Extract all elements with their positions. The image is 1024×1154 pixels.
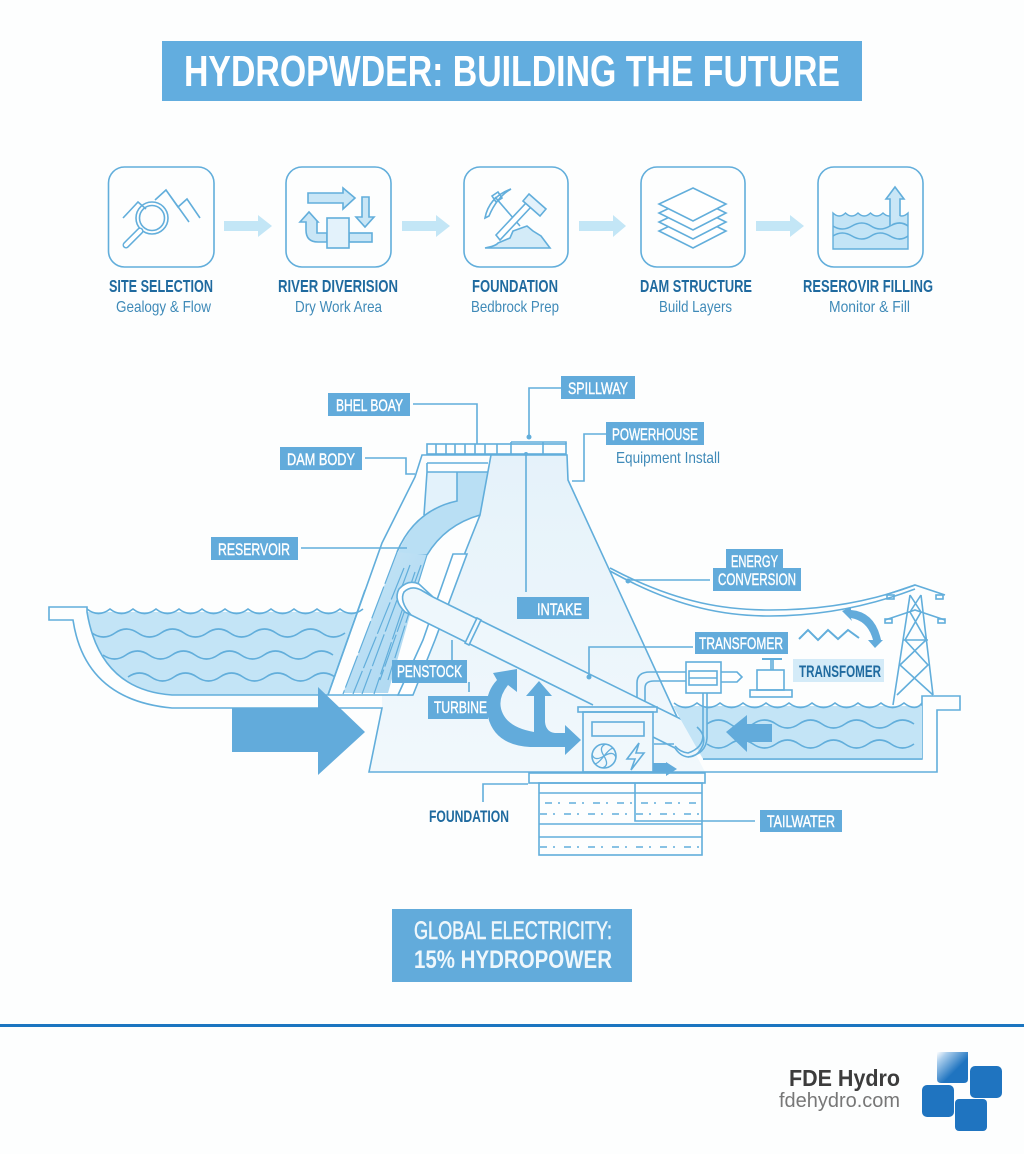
callout: global electricity xyxy=(392,909,632,982)
label: spillway xyxy=(526,376,635,440)
arrow xyxy=(756,215,804,237)
label: energy conversion: CONVERSION xyxy=(718,571,796,589)
reservoir water xyxy=(87,609,363,695)
label: energy conversion: ENERGY xyxy=(731,553,778,571)
dam cross-section diagram xyxy=(49,376,960,855)
title xyxy=(162,41,862,101)
label: intake xyxy=(517,452,589,619)
sublabel: Build Layers xyxy=(659,299,732,316)
label: transformer xyxy=(586,632,788,680)
label: intake: INTAKE xyxy=(537,601,582,619)
tailwater arrow xyxy=(726,715,772,752)
label: spillway: SPILLWAY xyxy=(568,380,628,398)
label: RESEROVIR FILLING xyxy=(803,276,933,296)
sublabel: Dry Work Area xyxy=(295,299,382,316)
label: FOUNDATION xyxy=(472,276,558,296)
icon: layers xyxy=(641,167,745,267)
icon: lightning bolt xyxy=(627,743,644,770)
penstock xyxy=(397,582,704,757)
footer divider xyxy=(0,1024,1024,1027)
label: tailwater: TAILWATER xyxy=(767,813,835,831)
label: penstock: PENSTOCK xyxy=(397,663,462,681)
dam body fill xyxy=(369,455,705,772)
icon: pick and hammer xyxy=(464,167,568,267)
sublabel: Bedbrock Prep xyxy=(471,299,559,316)
zigzag signal xyxy=(799,630,859,640)
title: HYDROPWDER: BUILDING THE FUTURE xyxy=(184,47,840,96)
foundation block xyxy=(529,773,705,855)
icon: magnifier over mountains xyxy=(108,167,214,267)
logo xyxy=(922,1052,1002,1131)
upper dam outline xyxy=(328,455,677,717)
footer brand text xyxy=(779,1065,900,1112)
label: energy conversion xyxy=(626,549,801,591)
callout: global electricity: GLOBAL ELECTRICITY: xyxy=(414,917,612,945)
arrow xyxy=(402,215,450,237)
transmission tower xyxy=(885,585,945,705)
note: Equipment Install xyxy=(616,450,720,467)
upper gate chamber xyxy=(397,455,491,603)
sublabel: Gealogy & Flow xyxy=(116,299,211,316)
label: foundation xyxy=(429,784,528,826)
label: reservoir: RESERVOIR xyxy=(218,541,290,559)
turbine flow arrows xyxy=(487,669,581,755)
label: dam body: DAM BODY xyxy=(287,451,355,469)
label: powerhouse xyxy=(572,422,720,481)
step: foundation xyxy=(464,167,568,316)
label: reservoir xyxy=(211,537,407,560)
white bypass band xyxy=(398,554,467,695)
process steps xyxy=(108,167,933,316)
step: river diversion xyxy=(278,167,398,316)
label: transformer (light): TRANSFOMER xyxy=(799,663,881,681)
step: dam structure xyxy=(640,167,752,316)
sublabel: Monitor & Fill xyxy=(829,299,910,316)
label: powerhouse: POWERHOUSE xyxy=(612,426,698,444)
label: foundation: FOUNDATION xyxy=(429,808,509,826)
label: bhel boay xyxy=(328,393,477,444)
callout: global electricity: 15% HYDROPOWER xyxy=(414,946,612,974)
turbine house xyxy=(578,707,657,772)
valve unit xyxy=(750,658,792,697)
label: tailwater xyxy=(635,783,842,832)
footer brand text: fdehydro.com xyxy=(779,1090,900,1112)
transformer pipework and box xyxy=(637,662,742,757)
curved arrow xyxy=(842,607,883,648)
label: DAM STRUCTURE xyxy=(640,276,752,296)
label: dam body xyxy=(280,447,415,474)
tailrace water xyxy=(673,703,922,759)
label: penstock xyxy=(392,640,467,683)
label: SITE SELECTION xyxy=(109,276,213,296)
icon: rising water xyxy=(818,167,923,267)
parapet xyxy=(427,442,566,454)
inclined channel xyxy=(343,552,427,694)
label: RIVER DIVERISION xyxy=(278,276,398,296)
penstock outlet xyxy=(675,727,704,757)
label: transformer (light) xyxy=(793,659,884,682)
outflow arrow xyxy=(653,762,677,776)
label: turbine: TURBINE xyxy=(434,699,487,717)
inflow arrow xyxy=(232,687,365,775)
basin wall outline xyxy=(49,590,960,772)
arrow xyxy=(224,215,272,237)
label: transformer: TRANSFOMER xyxy=(699,635,783,653)
label: bhel boay: BHEL BOAY xyxy=(336,397,403,415)
icon: turbine fan xyxy=(592,744,616,768)
transmission line xyxy=(610,568,915,616)
arrow xyxy=(579,215,626,237)
step: reservoir filling xyxy=(803,167,933,316)
step: site selection xyxy=(108,167,214,316)
icon: diversion arrows xyxy=(286,167,391,267)
footer brand text: FDE Hydro xyxy=(789,1065,900,1091)
label: turbine xyxy=(428,682,488,719)
